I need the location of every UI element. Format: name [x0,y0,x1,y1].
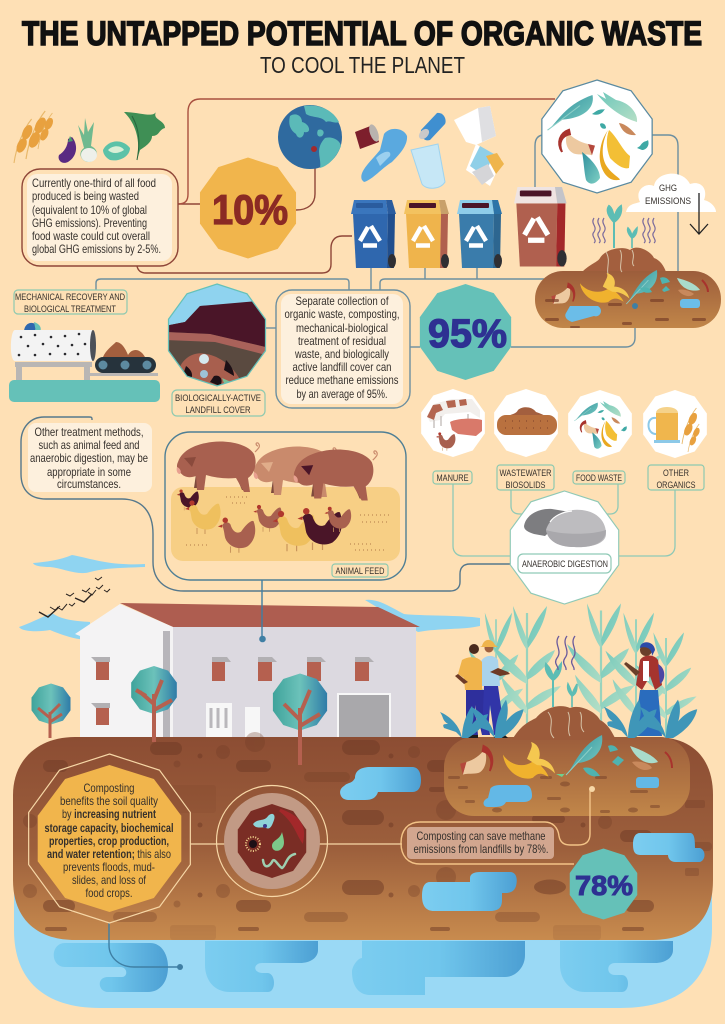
panel: composting benefits: benefits the soil quality [60,794,158,808]
blue connector to building [259,580,266,642]
composting mound on field [444,664,690,816]
water layer [14,880,712,1008]
label: biologically-active landfill cover: LANDFILL COVER [186,405,251,416]
label: wastewater biosolids: WASTEWATER [500,468,552,479]
icon: other organics [643,390,707,458]
label: food waste [573,471,625,484]
icon: mechanical treatment machine [9,322,160,402]
panel: separate collection text [276,290,410,408]
panel: food waste statistic text: Currently one-third of all food [32,176,156,190]
sky clouds [19,555,480,640]
panel: food waste statistic text: GHG emissions). Preventing [32,216,147,230]
panel: animal feed [165,432,406,580]
badge: 95% [420,284,511,380]
label: food waste: FOOD WASTE [576,473,622,484]
label: biologically-active landfill cover [172,390,265,416]
label: mechanical recovery: MECHANICAL RECOVERY AND [15,292,125,303]
panel: composting benefits: prevents floods, mud- [63,860,155,874]
label: other organics: OTHER [663,468,689,479]
connector line across soil [190,843,402,845]
icon: soil microbes [216,786,328,896]
badge: 78% [570,848,637,920]
cloud: GHG emissions [626,174,716,234]
icon: food waste [568,390,632,458]
farmers [455,640,510,738]
panel: food waste statistic text: global GHG emissions by 2-5%. [32,242,161,256]
label: animal feed: ANIMAL FEED [336,566,385,577]
panel: composting benefits: properties, crop production, [49,834,169,848]
panel: separate collection text: Separate collection of [296,294,389,308]
panel: separate collection text: organic waste, composting, [284,307,400,321]
label: biologically-active landfill cover: BIOLOGICALLY-ACTIVE [175,393,261,404]
panel: other treatment text: anaerobic digestion, may be [30,451,148,465]
anaerobic digestion connector lines [453,484,675,556]
label: mechanical recovery: BIOLOGICAL TREATMENT [24,304,116,315]
flow lines: brown connectors [137,99,555,273]
label: mechanical recovery [14,290,127,315]
building [75,603,420,740]
badge: 78%: 78% [575,870,633,901]
corn plants [469,603,697,738]
panel: separate collection text: treatment of residual [298,334,386,348]
panel: food waste statistic text: food waste could cut overall [32,229,150,243]
panel: other treatment text: such as animal feed and [38,438,140,452]
icon: manure [421,389,485,457]
label: wastewater biosolids [497,465,554,491]
soil texture [43,740,654,931]
blue pockets in soil [340,767,704,911]
panel: food waste statistic text: produced is being wasted [32,189,139,203]
label: other organics: ORGANICS [656,480,696,491]
panel: separate collection text: reduce methane emissions [286,373,398,387]
panel: separate collection text: mechanical-biological [296,321,388,335]
icon: recyclable trash [355,106,504,188]
label: animal feed [332,564,388,577]
badge: 10% [200,158,296,258]
panel: other treatment text [21,417,510,591]
label: manure: MANURE [436,473,468,484]
panel: composting benefits [29,754,190,970]
panel: anaerobic digestion: ANAEROBIC DIGESTION [522,559,608,570]
panel: other treatment text: appropriate in some [47,465,131,479]
soil layer [13,732,713,940]
panel: food scraps [542,80,652,193]
icon: globe [278,105,342,169]
badge: 95%: 95% [428,312,507,356]
panel: other treatment text: Other treatment methods, [34,425,144,439]
panel: composting benefits: Composting [84,781,134,795]
panel: food waste statistic text [22,169,178,266]
panel: separate collection text: by an average of 95%. [296,387,388,401]
label: manure [433,471,472,484]
panel: anaerobic digestion [510,491,619,604]
panel: composting saves methane: emissions from landfills by 78%. [414,842,548,856]
compost heap with emissions [535,206,721,328]
panel: composting benefits: and water retention; this also [47,847,171,861]
icon: wastewater biosolids [494,389,558,457]
panel: food waste statistic text: (equivalent to 10% of global [32,203,147,217]
panel: composting benefits: by increasing nutrient [62,807,156,821]
purple heat waves [556,636,575,670]
subtitle: TO COOL THE PLANET [260,52,465,78]
icon: birds [39,577,110,617]
cloud: GHG emissions: GHG [659,183,677,194]
icon: recycling bins [351,187,567,268]
label: wastewater biosolids: BIOSOLIDS [506,480,546,491]
icon: crops [14,111,165,163]
panel: composting benefits: food crops. [86,886,132,900]
cloud: GHG emissions: EMISSIONS [645,196,691,207]
farmer woman [624,642,664,736]
panel: landfill cover [168,283,266,387]
panel: separate collection text: waste, and biologically [294,347,389,361]
badge: 10%: 10% [212,186,288,233]
foreground blue plants [440,700,697,738]
panel: separate collection text: active landfill cover can [292,360,392,374]
flow lines: blue connectors [96,135,678,347]
panel: composting benefits: slides, and loss of [72,873,147,887]
label: other organics [648,465,704,491]
panel: other treatment text: circumstances. [57,477,121,491]
water patches [54,941,673,995]
panel: composting benefits: storage capacity, biochemical [44,821,174,835]
panel: composting saves methane: Composting can save methane [416,829,546,843]
trees [32,666,327,765]
panel: composting saves methane [401,786,595,864]
